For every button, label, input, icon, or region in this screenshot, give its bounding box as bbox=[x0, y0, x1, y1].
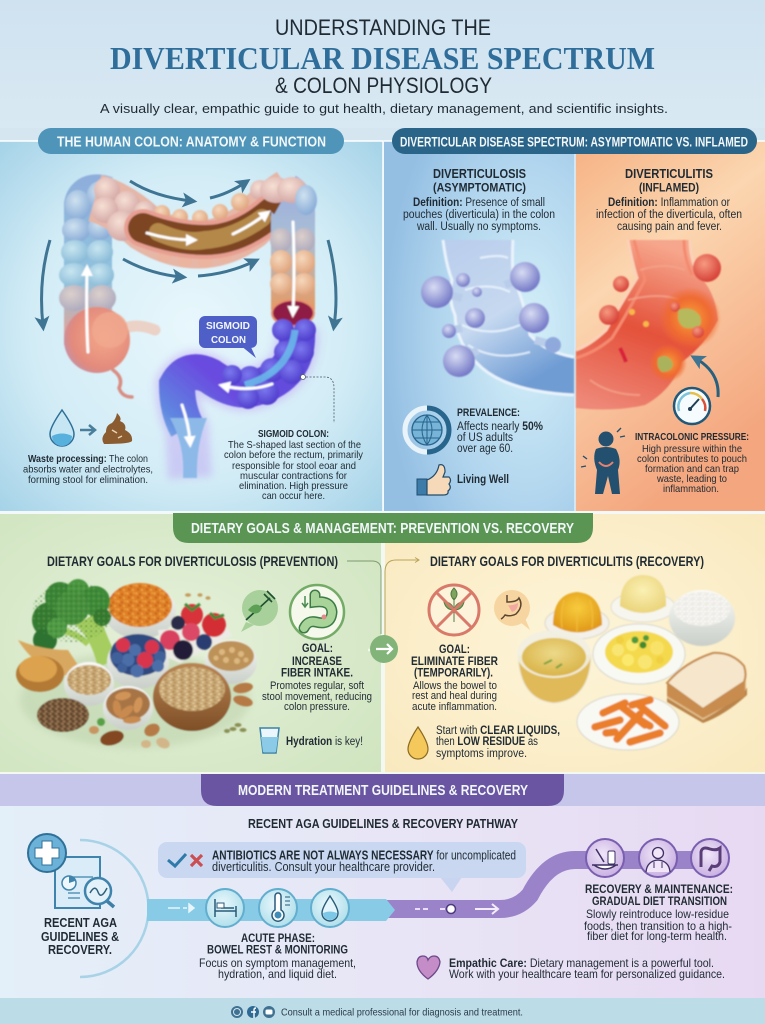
intracolonic pressure text: inflammation. bbox=[663, 483, 719, 495]
panel: diverticulosis bbox=[384, 141, 574, 511]
eliminate fiber goal text: (TEMPORARILY). bbox=[414, 668, 493, 680]
intracolonic pressure text: High pressure within the bbox=[642, 443, 742, 455]
waste processing text: Waste processing: The colon bbox=[28, 453, 148, 465]
main title block: UNDERSTANDING THE bbox=[275, 15, 491, 40]
treatment pill heading: MODERN TREATMENT GUIDELINES & RECOVERY bbox=[238, 782, 528, 799]
clear liquids note: Start with CLEAR LIQUIDS, bbox=[436, 725, 560, 737]
scrambled eggs plate bbox=[593, 624, 685, 684]
acute phase blue arrow bbox=[147, 899, 395, 921]
recovery and maintenance text: foods, then transition to a high- bbox=[584, 919, 732, 933]
recovery pathway purple arrow bbox=[385, 860, 720, 914]
intracolonic pressure text bbox=[635, 431, 749, 495]
icon: water drop bbox=[311, 889, 349, 927]
sigmoid colon label bbox=[199, 316, 257, 358]
increase fiber goal text: stool movement, reducing bbox=[262, 691, 372, 703]
sigmoid colon label: SIGMOID bbox=[206, 320, 250, 332]
icon: heart bbox=[417, 956, 440, 979]
sigmoid colon description: elimination. High pressure bbox=[239, 480, 348, 492]
recovery and maintenance text: fiber diet for long-term health. bbox=[587, 929, 727, 943]
icon: recovery meal bbox=[586, 839, 624, 877]
eliminate fiber goal text: GOAL: bbox=[439, 644, 470, 656]
sigmoid colon description: responsible for stool eoar and bbox=[232, 460, 356, 472]
main title block: & COLON PHYSIOLOGY bbox=[275, 73, 492, 98]
white rice bowl bbox=[669, 590, 735, 646]
connector arrow prevention to recovery bbox=[347, 560, 419, 663]
icon: clear liquid drop bbox=[408, 727, 428, 759]
sigmoid leader line bbox=[300, 374, 334, 423]
blueberry bowl bbox=[107, 634, 169, 689]
AGA guidelines label bbox=[41, 915, 119, 957]
broth bowl bbox=[517, 630, 591, 703]
berry tray bbox=[158, 604, 232, 663]
diverticulitis heading bbox=[625, 166, 713, 194]
colon pill heading bbox=[38, 128, 344, 154]
diverticulosis definition: Definition: Presence of small bbox=[413, 197, 545, 209]
bread slices bbox=[667, 653, 747, 723]
bread and grain wrap bbox=[16, 640, 80, 692]
panel: treatment guidelines bbox=[0, 774, 765, 998]
sigmoid colon description: colon before the rectum, primarily bbox=[224, 449, 364, 461]
icon: colon bbox=[691, 839, 729, 877]
sigmoid colon description: can occur here. bbox=[262, 490, 325, 502]
antibiotics callout: diverticulitis. Consult your healthcare provider. bbox=[212, 860, 435, 874]
icon: person in pain bbox=[581, 428, 625, 494]
descending colon bbox=[260, 177, 317, 326]
eliminate fiber goal text: acute inflammation. bbox=[412, 701, 497, 713]
icon: stomach circle bbox=[290, 585, 344, 639]
prevalence text bbox=[457, 407, 543, 455]
panel: recovery diet bbox=[385, 514, 765, 772]
icon: stomach bubble bbox=[494, 590, 530, 630]
icon: water drop to stool bbox=[50, 410, 132, 446]
waste processing text: absorbs water and electrolytes, bbox=[23, 464, 153, 476]
chickpea bowl bbox=[205, 640, 257, 684]
flax seed pile bbox=[37, 698, 89, 732]
broccoli bbox=[32, 579, 117, 668]
acute phase text: ACUTE PHASE: bbox=[241, 931, 315, 945]
eliminate fiber goal text bbox=[411, 644, 499, 713]
acute phase text bbox=[199, 931, 356, 981]
colon flow arrows bbox=[42, 181, 336, 326]
sigmoid colon label: COLON bbox=[211, 334, 246, 346]
dietary pill heading: DIETARY GOALS & MANAGEMENT: PREVENTION VS. RECOVERY bbox=[191, 520, 574, 537]
intracolonic pressure text: colon contributes to pouch bbox=[637, 453, 747, 465]
dietary pill heading bbox=[173, 513, 593, 543]
illustration: inflamed colon bbox=[576, 240, 721, 409]
disclaimer: Consult a medical professional for diagnosis and treatment. bbox=[281, 1006, 523, 1018]
diverticulitis definition: causing pain and fever. bbox=[617, 221, 722, 233]
sigmoid colon bbox=[170, 319, 316, 478]
acute phase text: hydration, and liquid diet. bbox=[218, 967, 337, 981]
icon: doctor bbox=[639, 839, 677, 877]
hydration note: Hydration is key! bbox=[286, 736, 363, 748]
antibiotics callout: ANTIBIOTICS ARE NOT ALWAYS NECESSARY for uncomplicated bbox=[212, 848, 516, 862]
diverticulitis heading: (INFLAMED) bbox=[639, 180, 699, 194]
diverticulitis definition bbox=[596, 197, 742, 233]
icon: thermometer bbox=[259, 889, 297, 927]
low residue food illustration bbox=[517, 575, 747, 750]
treatment pill heading bbox=[201, 774, 564, 806]
prevalence text: of US adults bbox=[457, 432, 513, 444]
diverticulitis definition: Definition: Inflammation or bbox=[608, 197, 730, 209]
acute phase text: BOWEL REST & MONITORING bbox=[207, 942, 348, 956]
spectrum pill heading bbox=[384, 128, 765, 154]
increase fiber goal text: GOAL: bbox=[302, 643, 333, 655]
waste processing text: forming stool for elimination. bbox=[28, 474, 148, 486]
acute phase text: Focus on symptom management, bbox=[199, 956, 356, 970]
AGA guidelines label: RECOVERY. bbox=[48, 942, 112, 957]
carrot plate bbox=[577, 694, 679, 750]
colon illustration bbox=[59, 177, 317, 478]
main title block bbox=[110, 15, 655, 98]
icon: thumbs up bbox=[417, 465, 450, 495]
arrow: pressure to pouch bbox=[695, 358, 718, 397]
diverticulitis heading: DIVERTICULITIS bbox=[625, 166, 713, 181]
icon: no fiber sign bbox=[429, 585, 479, 635]
transverse colon bbox=[92, 177, 290, 268]
empathic care text: Work with your healthcare team for personalized guidance. bbox=[449, 967, 725, 981]
eliminate fiber goal text: ELIMINATE FIBER bbox=[411, 656, 499, 668]
recovery and maintenance text bbox=[584, 882, 733, 943]
icon: hospital bed bbox=[206, 889, 244, 927]
guidelines arc bbox=[80, 840, 148, 977]
colon pill heading: THE HUMAN COLON: ANATOMY & FUNCTION bbox=[57, 134, 326, 150]
icon: check and cross bbox=[168, 854, 202, 866]
icons: social bbox=[231, 1006, 275, 1018]
empathic care text bbox=[449, 956, 725, 981]
waste processing text bbox=[23, 453, 153, 486]
prevalence text: PREVALENCE: bbox=[457, 407, 520, 419]
icon: pressure gauge bbox=[674, 388, 710, 424]
increase fiber goal text: Promotes regular, soft bbox=[270, 680, 364, 692]
icon: globe prevalence bbox=[405, 408, 449, 452]
sigmoid colon description: SIGMOID COLON: bbox=[258, 428, 329, 440]
pale jelly bbox=[611, 575, 675, 622]
recovery pathway heading: RECENT AGA GUIDELINES & RECOVERY PATHWAY bbox=[248, 816, 518, 831]
increase fiber goal text: colon pressure. bbox=[284, 701, 350, 713]
prevalence text: Affects nearly 50% bbox=[457, 421, 543, 433]
increase fiber goal text: INCREASE bbox=[292, 656, 342, 668]
ascending colon bbox=[59, 181, 130, 373]
high fiber food illustration bbox=[16, 579, 257, 750]
colon white flow arrows bbox=[87, 214, 294, 442]
diverticulitis definition: infection of the diverticula, often bbox=[596, 209, 742, 221]
icon: water glass bbox=[260, 728, 279, 753]
sigmoid colon description bbox=[224, 428, 364, 502]
footer bbox=[0, 998, 765, 1024]
appendix bbox=[113, 326, 155, 397]
wooden rice bowl bbox=[153, 663, 231, 731]
subtitle: A visually clear, empathic guide to gut health, dietary management, and scientific insights. bbox=[100, 101, 668, 116]
recovery and maintenance text: RECOVERY & MAINTENANCE: bbox=[585, 882, 733, 896]
sigmoid colon description: muscular contractions for bbox=[240, 470, 347, 482]
yellow jelly bbox=[545, 592, 609, 639]
panel: prevention diet bbox=[0, 514, 382, 772]
clear liquids note: then LOW RESIDUE as bbox=[436, 736, 538, 748]
icon: fork and leaf bubble bbox=[241, 590, 278, 632]
panel: diverticulitis bbox=[576, 141, 765, 511]
diverticulosis definition: wall. Usually no symptoms. bbox=[416, 221, 541, 233]
prevention heading: DIETARY GOALS FOR DIVERTICULOSIS (PREVENTION) bbox=[47, 553, 338, 569]
main title block: DIVERTICULAR DISEASE SPECTRUM bbox=[110, 40, 655, 76]
diverticulosis heading: (ASYMPTOMATIC) bbox=[433, 180, 526, 194]
antibiotics callout bbox=[158, 842, 526, 892]
increase fiber goal text: FIBER INTAKE. bbox=[281, 668, 353, 680]
header background bbox=[0, 0, 765, 128]
grain bowl small bbox=[64, 662, 114, 706]
diverticulosis heading: DIVERTICULOSIS bbox=[433, 166, 526, 181]
diverticulosis definition: pouches (diverticula) in the colon bbox=[403, 209, 555, 221]
prevalence text: over age 60. bbox=[457, 443, 513, 455]
lentil bowl bbox=[104, 583, 176, 639]
increase fiber goal text bbox=[262, 643, 372, 713]
clear liquids note bbox=[436, 725, 560, 760]
clear liquids note: symptoms improve. bbox=[436, 748, 527, 760]
empathic care text: Empathic Care: Dietary management is a powerful tool. bbox=[449, 956, 714, 970]
recovery and maintenance text: Slowly reintroduce low-residue bbox=[586, 907, 729, 921]
eliminate fiber goal text: Allows the bowel to bbox=[413, 680, 497, 692]
recovery and maintenance text: GRADUAL DIET TRANSITION bbox=[592, 894, 727, 908]
eliminate fiber goal text: rest and heal during bbox=[412, 690, 497, 702]
AGA guidelines label: GUIDELINES & bbox=[41, 929, 119, 944]
diverticulosis heading bbox=[433, 166, 526, 194]
treatment band bbox=[0, 774, 765, 806]
living well label: Living Well bbox=[457, 474, 509, 486]
intracolonic pressure text: waste, leading to bbox=[656, 473, 727, 485]
panel: human colon bbox=[0, 128, 383, 511]
illustration: pouches in colon wall bbox=[421, 240, 574, 395]
scattered nuts bbox=[89, 593, 254, 750]
intracolonic pressure text: formation and can trap bbox=[645, 463, 739, 475]
almond bowl bbox=[103, 686, 153, 730]
sigmoid colon description: The S-shaped last section of the bbox=[228, 439, 361, 451]
AGA guidelines label: RECENT AGA bbox=[44, 915, 118, 930]
icon: AGA guidelines document bbox=[28, 834, 114, 908]
diverticulosis definition bbox=[403, 197, 555, 233]
